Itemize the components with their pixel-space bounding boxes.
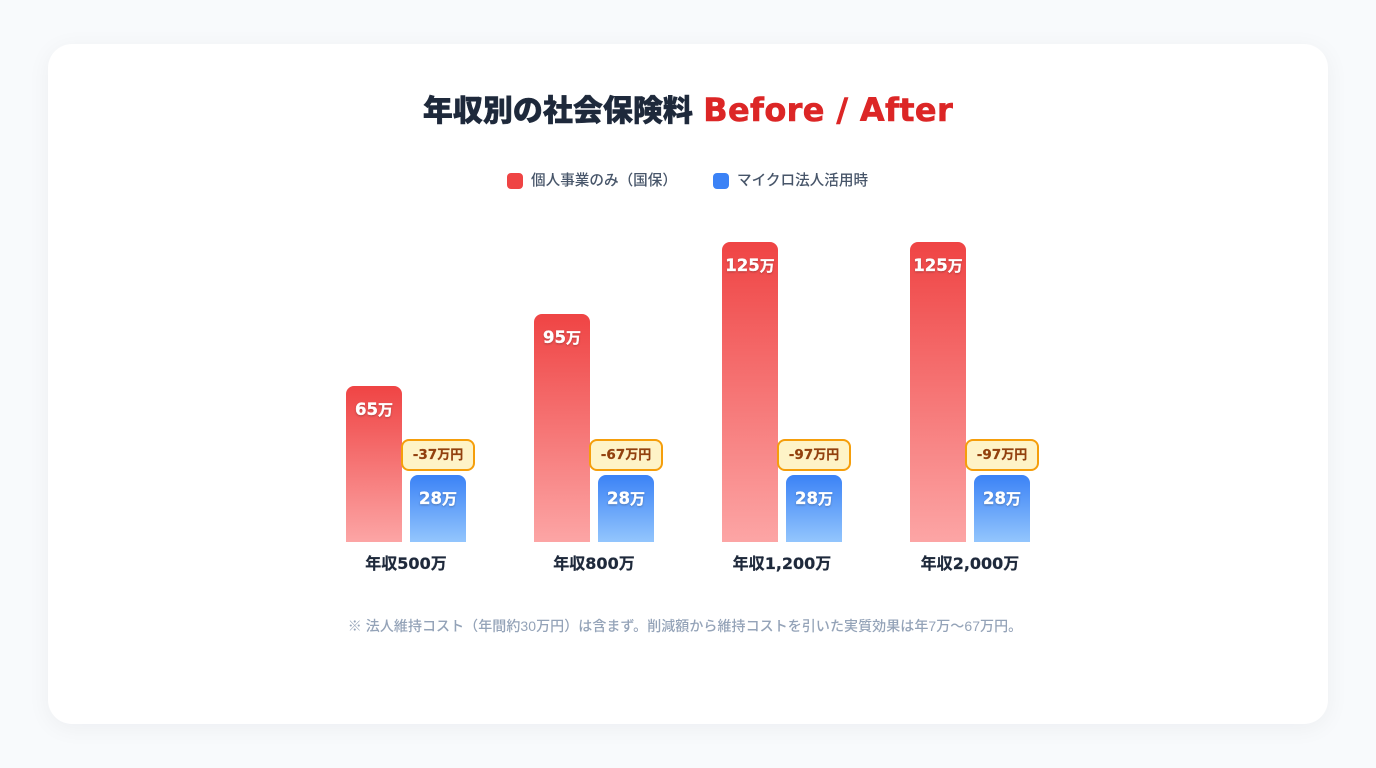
bar: 500 red: 65万 — [355, 400, 393, 419]
bar: 1200 red — [722, 242, 778, 542]
bar: 800 red: 95万 — [543, 328, 581, 347]
bar: 800 red — [534, 314, 590, 542]
bar: 800 blue: 28万 — [607, 489, 645, 508]
bar: 1200 blue: 28万 — [795, 489, 833, 508]
footnote: ※ 法人維持コスト（年間約30万円）は含まず。削減額から維持コストを引いた実質効果は年7万〜67万円。 — [348, 618, 1022, 634]
bar: 2000 blue: 28万 — [983, 489, 1021, 508]
badge: 500 reduction — [401, 439, 475, 471]
legend label: micro corporation: マイクロ法人活用時 — [737, 173, 868, 189]
badge: 800 reduction: -67万円 — [601, 447, 651, 463]
bar: 2000 red: 125万 — [913, 256, 963, 275]
bar: 2000 red — [910, 242, 966, 542]
badge: 1200 reduction — [777, 439, 851, 471]
bar: 500 blue: 28万 — [419, 489, 457, 508]
bar: 1200 blue — [786, 475, 842, 542]
legend swatch: individual business — [507, 173, 523, 189]
bar: 2000 blue — [974, 475, 1030, 542]
badge: 500 reduction: -37万円 — [413, 447, 463, 463]
bar: 500 red — [346, 386, 402, 542]
badge: 800 reduction — [589, 439, 663, 471]
legend label: individual business: 個人事業のみ（国保） — [531, 173, 677, 189]
badge: 1200 reduction: -97万円 — [789, 447, 839, 463]
badge: 2000 reduction: -97万円 — [977, 447, 1027, 463]
axis label: 800: 年収800万 — [553, 554, 635, 573]
axis label: 500: 年収500万 — [365, 554, 447, 573]
bar: 800 blue — [598, 475, 654, 542]
badge: 2000 reduction — [965, 439, 1039, 471]
bar: 1200 red: 125万 — [725, 256, 775, 275]
axis label: 2000: 年収2,000万 — [921, 554, 1019, 573]
title: 年収別の社会保険料 Before / After — [423, 91, 953, 129]
legend swatch: micro corporation — [713, 173, 729, 189]
bar: 500 blue — [410, 475, 466, 542]
axis label: 1200: 年収1,200万 — [733, 554, 831, 573]
